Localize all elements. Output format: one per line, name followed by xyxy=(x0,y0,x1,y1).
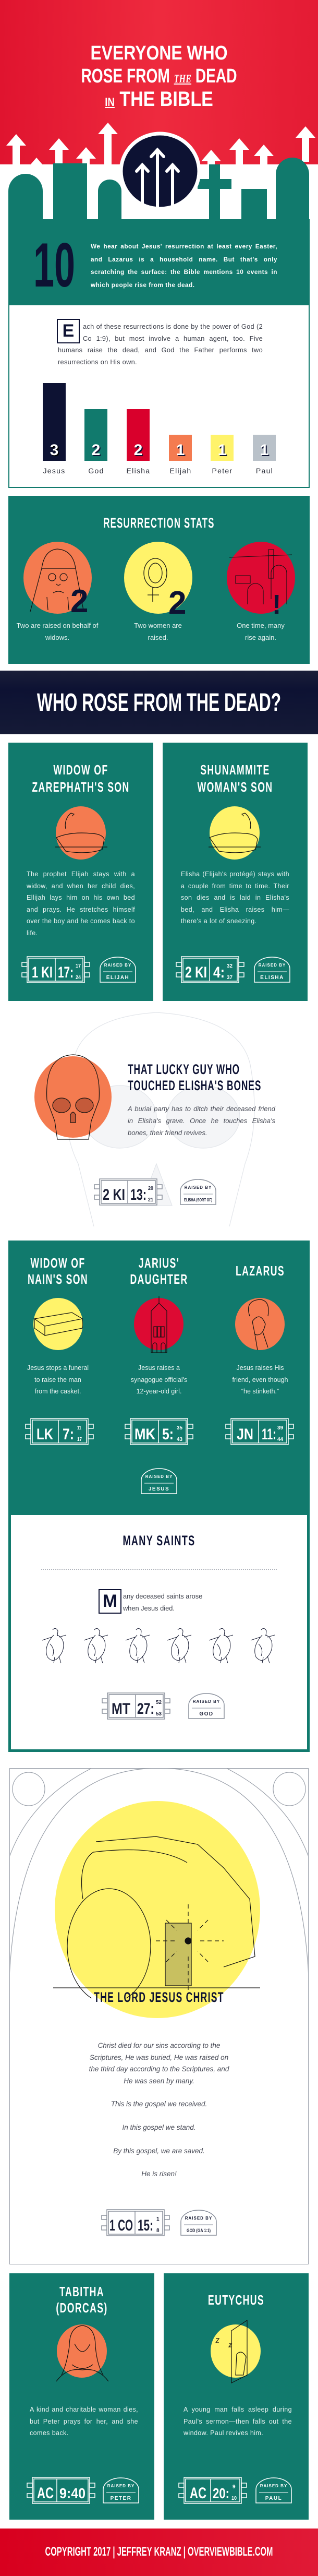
column: lazarus: Jesus raises His xyxy=(237,1364,284,1372)
panel: resurrection stats xyxy=(8,496,310,664)
stat: women: 2 xyxy=(168,585,186,621)
bar chart: 2 xyxy=(92,442,100,459)
stamp raised by elijah xyxy=(100,957,136,983)
inner box: many saints: when Jesus died. xyxy=(123,1604,175,1612)
card: tabitha: (DORCAS) xyxy=(56,2300,108,2316)
bar chart: 2 xyxy=(134,442,142,459)
panel: the lord jesus christ: GOD (GA 1:1) xyxy=(187,2228,211,2233)
panel: the lord jesus christ xyxy=(9,1768,309,2264)
stat: widows: 2 xyxy=(70,583,88,619)
stamp raised by jesus: RAISED BY xyxy=(145,1474,173,1479)
column: jarius' daughter: 12-year-old girl. xyxy=(137,1388,181,1395)
stat: many xyxy=(227,542,295,641)
heading: RESURRECTION STATS xyxy=(103,515,215,531)
header illustration: arrows, tombstones, oval xyxy=(6,123,315,219)
inner box: many saints xyxy=(11,1515,307,1749)
title: ROSE FROM THE DEAD xyxy=(81,65,237,87)
stat: women: raised. xyxy=(148,634,168,641)
card: tabitha: 9:40 xyxy=(59,2485,85,2501)
reference 1 CO 15:1-8 xyxy=(101,2209,170,2236)
saints figures row xyxy=(42,1628,275,1664)
reference 1 CO 15:1-8: 8 xyxy=(156,2228,160,2234)
card: tabitha: RAISED BY xyxy=(107,2484,134,2488)
reference 2 KI 4:32-37 xyxy=(176,956,244,983)
text: the third day according to the Scriptures, and xyxy=(89,2065,229,2073)
drop cap M: M xyxy=(103,1591,117,1611)
column: jarius' daughter: DAUGHTER xyxy=(130,1271,188,1287)
stat: many: ! xyxy=(272,590,281,620)
stamp raised by elijah: RAISED BY xyxy=(104,963,131,968)
footer: COPYRIGHT 2017 | JEFFREY KRANZ | OVERVIEWBIBLE.COM xyxy=(45,2545,273,2559)
reference MT 27:52-53: 52 xyxy=(156,1700,162,1706)
reference 2 KI 13:20-21: 20 xyxy=(148,1186,153,1191)
column: jarius' daughter: 43 xyxy=(177,1437,182,1442)
stat: many: rise again. xyxy=(245,634,276,641)
column: widow of nain's son: NAIN'S SON xyxy=(28,1271,88,1287)
card: widow of zarephath's son: The prophet Elijah stays with a widow, and when her child dies, Ellijah lays him on his own bed and prays. He stretches himself over the boy and he comes back to life. xyxy=(27,870,135,937)
column: jarius' daughter: 5: xyxy=(162,1426,174,1443)
text: He was seen by many. xyxy=(124,2077,194,2085)
card: eutychus xyxy=(164,2273,309,2520)
card: eutychus: RAISED BY xyxy=(260,2484,287,2488)
reference MT 27:52-53: 53 xyxy=(156,1711,162,1717)
column: lazarus xyxy=(225,1263,294,1445)
column: widow of nain's son: WIDOW OF xyxy=(30,1255,85,1271)
stamp raised by jesus xyxy=(141,1468,177,1494)
column: lazarus: LAZARUS xyxy=(236,1263,285,1279)
card: widow of zarephath's son: ZAREPHATH'S SON xyxy=(32,779,130,795)
card: tabitha: TABITHA xyxy=(59,2284,104,2299)
reference MT 27:52-53 xyxy=(102,1692,170,1720)
card: shunammite woman's son: Elisha (Elijah's protégé) stays with a couple from time to time. Their son dies and is laid in Elisha's bed, and Elisha raises him—there's a lot of sneezing. xyxy=(181,870,289,925)
reference 1 KI 17:17-24: 1 KI xyxy=(32,964,53,981)
bar chart: God xyxy=(88,467,104,475)
column: widow of nain's son: 17 xyxy=(77,1437,82,1442)
column: widow of nain's son: 11 xyxy=(77,1425,81,1431)
column: widow of nain's son: LK xyxy=(36,1426,53,1443)
title: THE LORD JESUS CHRIST xyxy=(94,1989,224,2005)
stat: widows: Two are raised on behalf of widows. xyxy=(17,622,98,641)
reference 2 KI 13:20-21: 2 KI xyxy=(103,1186,125,1203)
card: shunammite woman's son: SHUNAMMITE xyxy=(200,762,270,778)
reference 2 KI 13:20-21 xyxy=(94,1178,163,1206)
card: eutychus: 20: xyxy=(213,2485,229,2501)
text xyxy=(89,2042,229,2178)
text: Scriptures, He was buried, He was raised on xyxy=(90,2054,228,2061)
stamp elisha (sort of): RAISED BY xyxy=(185,1185,212,1190)
column: jarius' daughter: synagogue official's xyxy=(131,1376,187,1383)
bar chart: 1 xyxy=(176,442,185,459)
drop cap E xyxy=(57,319,80,343)
bar chart: 1 xyxy=(218,442,226,459)
column: widow of nain's son: to raise the man xyxy=(34,1376,81,1383)
column: jarius' daughter xyxy=(125,1255,193,1445)
stat: widows xyxy=(17,542,98,641)
reference MT 27:52-53: MT xyxy=(112,1700,130,1718)
reference 2 KI 4:32-37: 37 xyxy=(227,975,233,981)
paragraph: ach of these resurrections is done by the power of God (2 Co 1:9), but most involve a human agent, too. Five humans raise the dead, and God the Father performs two resurrections on His own. xyxy=(58,323,263,366)
panel: bar chart box xyxy=(8,305,310,488)
intro text: We hear about Jesus' resurrection at least every Easter, and Lazarus is a household name. But that's only scratching the surface: the Bible mentions 10 events in which people rise from the dead. xyxy=(91,243,277,289)
stamp raised by elijah: ELIJAH xyxy=(106,975,129,981)
stamp raised by elisha xyxy=(254,957,290,983)
panel: intro 10 xyxy=(8,219,310,305)
drop cap E: E xyxy=(63,321,74,341)
stamp raised by jesus: JESUS xyxy=(149,1486,169,1492)
column: lazarus: JN xyxy=(237,1426,253,1443)
inner box: many saints: GOD xyxy=(199,1711,214,1717)
card: eutychus: AC xyxy=(190,2485,206,2502)
card: tabitha: A kind and charitable woman dies, but Peter prays for her, and she comes back. xyxy=(30,2406,138,2437)
column: widow of nain's son xyxy=(25,1255,94,1445)
column: lazarus: 11: xyxy=(262,1426,276,1443)
column: jarius' daughter: JARIUS' xyxy=(139,1255,179,1271)
bar chart: 1 xyxy=(260,442,268,459)
title: EVERYONE WHO xyxy=(90,42,228,64)
stamp raised by elisha: ELISHA xyxy=(260,975,284,981)
card: eutychus: 10 xyxy=(231,2496,237,2501)
bar chart: Elijah xyxy=(169,467,192,475)
column: lazarus: 44 xyxy=(277,1437,283,1442)
stamp raised by elisha: RAISED BY xyxy=(259,963,286,968)
reference 1 CO 15:1-8: 1 xyxy=(156,2216,160,2222)
panel: the lord jesus christ: RAISED BY xyxy=(185,2216,212,2221)
bar chart: 3 xyxy=(50,442,58,459)
card: shunammite woman's son: WOMAN'S SON xyxy=(198,779,273,795)
inner box: many saints: RAISED BY xyxy=(193,1699,220,1704)
card: widow of zarephath's son: WIDOW OF xyxy=(53,762,108,778)
title: IN THE BIBLE xyxy=(105,88,213,111)
bar chart: Paul xyxy=(256,467,273,475)
column: jarius' daughter: 35 xyxy=(177,1425,182,1431)
big number 10: 10 xyxy=(33,230,75,300)
stat: many: One time, many xyxy=(237,622,285,629)
column: lazarus: 39 xyxy=(277,1425,283,1431)
card: widow of zarephath's son xyxy=(8,743,153,1001)
column: jarius' daughter: MK xyxy=(134,1426,155,1443)
section: lucky guy (skull) xyxy=(34,1012,275,1226)
column: widow of nain's son: Jesus stops a funeral xyxy=(27,1364,89,1372)
title: TOUCHED ELISHA'S BONES xyxy=(128,1078,261,1093)
bar chart: Elisha xyxy=(127,467,150,475)
inner box: many saints: MANY SAINTS xyxy=(123,1533,195,1548)
card: tabitha: AC xyxy=(37,2485,54,2502)
text: By this gospel, we are saved. xyxy=(113,2147,205,2155)
reference 2 KI 13:20-21: 13: xyxy=(130,1186,146,1203)
card: eutychus: 9 xyxy=(233,2484,236,2490)
banner: who rose from the dead xyxy=(0,671,318,734)
text: A burial party has to ditch their deceased friend in Elisha's grave. Once he touches Elisha's bones, their friend revives. xyxy=(128,1105,275,1137)
column: widow of nain's son: 7: xyxy=(63,1426,74,1443)
column: lazarus: friend, even though xyxy=(232,1376,288,1383)
card: shunammite woman's son xyxy=(163,743,308,1001)
reference 1 CO 15:1-8: 15: xyxy=(138,2217,153,2234)
card: eutychus: PAUL xyxy=(265,2496,282,2501)
panel: raised by jesus xyxy=(8,1241,310,1752)
bar chart: Peter xyxy=(212,467,233,475)
stat: women xyxy=(124,542,192,641)
card: eutychus: EUTYCHUS xyxy=(208,2292,264,2308)
reference 2 KI 4:32-37: 4: xyxy=(213,964,225,981)
icon: empty tomb in yellow circle xyxy=(55,1801,260,2018)
card: tabitha xyxy=(9,2273,154,2520)
reference 1 KI 17:17-24: 17 xyxy=(76,963,81,969)
icon: bed xyxy=(210,806,260,860)
reference 1 CO 15:1-8: 1 CO xyxy=(109,2217,133,2234)
bar chart: Jesus xyxy=(43,467,66,475)
card: eutychus: A young man falls asleep during Paul's sermon—then falls out the window. Paul revives him. xyxy=(184,2406,292,2437)
banner: who rose from the dead: WHO ROSE FROM THE DEAD? xyxy=(37,689,281,717)
column: jarius' daughter: Jesus raises a xyxy=(138,1364,180,1372)
stat: women: Two women are xyxy=(134,622,182,629)
reference 2 KI 4:32-37: 2 KI xyxy=(185,964,207,981)
title xyxy=(81,42,237,111)
card: tabitha: PETER xyxy=(111,2496,131,2501)
stamp elisha (sort of) xyxy=(180,1179,216,1205)
text: This is the gospel we received. xyxy=(111,2100,207,2108)
text: In this gospel we stand. xyxy=(122,2124,196,2131)
reference MT 27:52-53: 27: xyxy=(137,1700,154,1718)
reference 2 KI 13:20-21: 21 xyxy=(148,1197,153,1203)
icon: skull xyxy=(34,1056,112,1138)
title xyxy=(128,1062,261,1093)
bar chart xyxy=(43,383,276,475)
icon: bed xyxy=(56,806,106,860)
reference 1 KI 17:17-24: 24 xyxy=(76,975,81,981)
column: lazarus: “he stinketh.” xyxy=(241,1388,279,1395)
text: He is risen! xyxy=(141,2170,177,2178)
title: THAT LUCKY GUY WHO xyxy=(128,1062,240,1077)
reference 1 KI 17:17-24 xyxy=(21,956,90,983)
footer xyxy=(0,2529,318,2576)
text: Christ died for our sins according to the xyxy=(98,2042,220,2049)
reference 1 KI 17:17-24: 17: xyxy=(58,964,74,981)
faint background skull xyxy=(69,1012,254,1226)
column: widow of nain's son: from the casket. xyxy=(35,1388,81,1395)
drop cap M xyxy=(99,1589,121,1614)
reference 2 KI 4:32-37: 32 xyxy=(227,963,233,969)
header: red background with title xyxy=(0,0,318,164)
inner box: many saints: any deceased saints arose xyxy=(123,1592,202,1600)
